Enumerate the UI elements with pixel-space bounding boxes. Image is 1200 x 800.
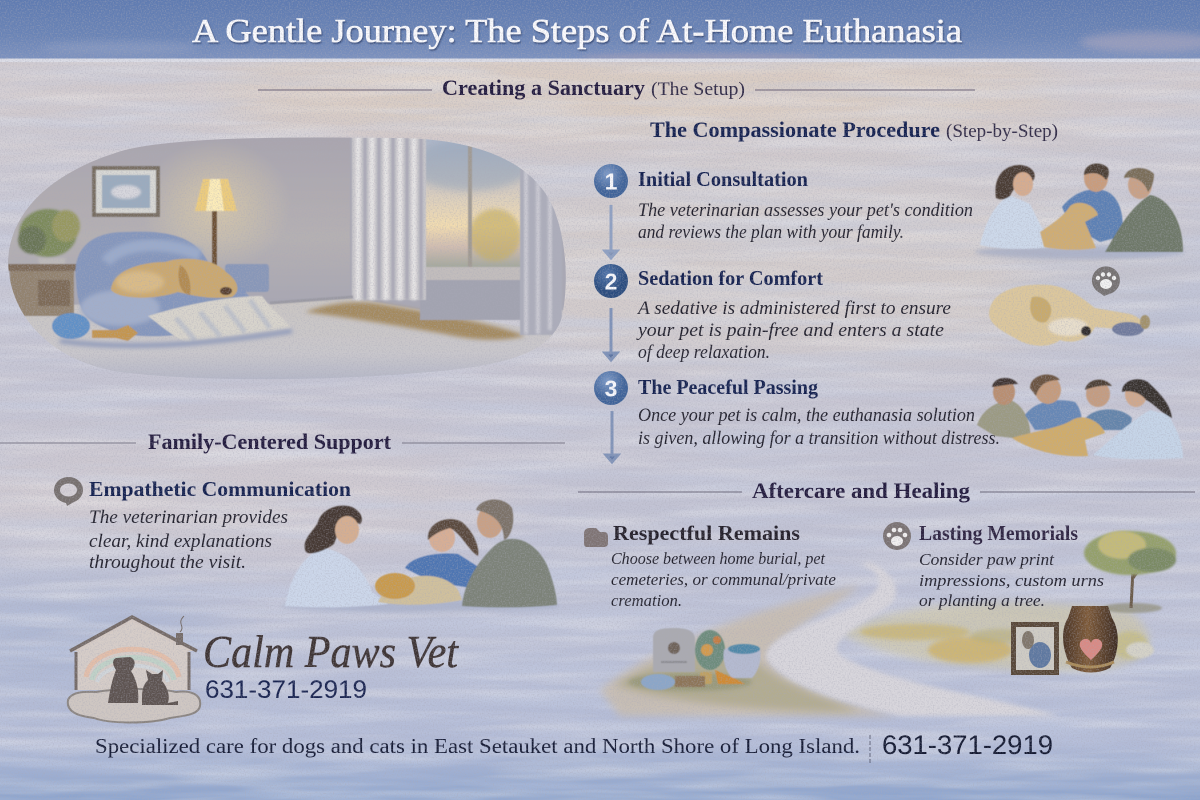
nightstand <box>8 264 76 271</box>
illustration: vet with child, parent and dog <box>280 500 560 612</box>
skirting <box>270 297 353 303</box>
father <box>462 539 557 607</box>
child <box>405 554 480 588</box>
title banner <box>0 0 1200 62</box>
body text: clear, kind explanations <box>89 532 272 552</box>
title: A Gentle Journey: The Steps of At-Home Euthanasia <box>192 13 962 50</box>
icon: paw speech bubble <box>1092 266 1120 296</box>
arrow 1 to 2 <box>605 205 617 258</box>
man blue <box>1062 189 1123 242</box>
illustration: photo frame <box>1011 622 1059 675</box>
footer line <box>95 730 1053 765</box>
block: lasting memorials text: Consider paw print <box>919 550 1055 569</box>
vet <box>980 196 1062 249</box>
heading: aftercare and healing: Aftercare and Healing <box>752 478 970 503</box>
plant <box>16 208 82 264</box>
step 2 badge <box>594 264 628 298</box>
step 1 text: and reviews the plan with your family. <box>638 223 904 243</box>
block: respectful remains text: Choose between home burial, pet <box>611 549 826 568</box>
step 3 badge <box>594 371 628 405</box>
block: respectful remains heading: Respectful Remains <box>613 521 800 545</box>
illustration: sedated dog resting <box>989 266 1150 346</box>
illustration: urn with heart <box>1063 606 1154 672</box>
step 2 heading: Sedation for Comfort <box>638 266 823 290</box>
heading: creating a sanctuary <box>258 75 975 100</box>
dog <box>378 576 462 605</box>
jar <box>723 644 761 678</box>
logo wordmark: Calm Paws Vet <box>203 626 459 677</box>
step 2 <box>594 264 951 363</box>
dog <box>1040 203 1098 250</box>
man green <box>1105 195 1183 252</box>
icon: paw circle <box>883 522 911 550</box>
block: lasting memorials text: or planting a tree. <box>919 591 1045 610</box>
step 2 text: of deep relaxation. <box>638 343 770 363</box>
block: empathetic communication <box>54 477 351 573</box>
flowers <box>695 630 725 670</box>
icon: folder <box>584 528 608 547</box>
arrow 3 <box>606 411 618 462</box>
step 1 <box>594 164 973 258</box>
step 3 text: Once your pet is calm, the euthanasia solution <box>638 406 975 426</box>
sofa cushion right <box>225 264 269 292</box>
footer phone: 631-371-2919 <box>882 730 1053 760</box>
heading: compassionate procedure: (Step-by-Step) <box>946 121 1058 142</box>
block: lasting memorials text: impressions, custom urns <box>919 571 1104 590</box>
step 2 text: your pet is pain-free and enters a state <box>636 321 944 341</box>
illustration: vet and family with dog <box>975 164 1185 259</box>
illustration: family gathered with vet <box>977 374 1183 459</box>
heart <box>1080 639 1102 660</box>
heading: creating a sanctuary: (The Setup) <box>651 79 745 100</box>
footer tagline: Specialized care for dogs and cats in East Setauket and North Shore of Long Island. <box>95 734 860 758</box>
winding path <box>767 562 1060 716</box>
heading: compassionate procedure: The Compassionate Procedure <box>650 117 940 142</box>
toys <box>52 313 90 339</box>
heading: creating a sanctuary: Creating a Sanctuary <box>442 75 645 100</box>
step 1 badge <box>594 164 628 198</box>
block: respectful remains text: cemeteries, or communal/private <box>611 570 836 589</box>
step 2 text: A sedative is administered first to ensure <box>636 299 951 319</box>
step 1 heading: Initial Consultation <box>638 167 808 191</box>
floor <box>26 298 552 379</box>
arrow 2 to 3 <box>605 308 617 360</box>
illustration: tree <box>1084 531 1176 613</box>
heading: Empathetic Communication <box>89 477 351 501</box>
block: lasting memorials heading: Lasting Memorials <box>919 521 1078 545</box>
logo phone: 631-371-2919 <box>205 676 367 704</box>
gravestone <box>653 628 695 672</box>
step 3 text: is given, allowing for a transition without distress. <box>638 429 1000 449</box>
step 3 badge: 3 <box>605 376 617 402</box>
vet <box>285 548 388 607</box>
curtains <box>352 132 426 300</box>
sofa <box>75 232 262 336</box>
blanket <box>148 296 291 342</box>
picture <box>92 166 160 217</box>
step 3 <box>594 371 1000 462</box>
illustration: sanctuary room with sleeping dog <box>8 138 566 379</box>
body text: throughout the visit. <box>89 553 246 573</box>
illustration: gravestone and keepsakes <box>628 628 761 691</box>
dog and cat silhouettes <box>108 657 138 703</box>
window <box>426 140 520 267</box>
heading: family-centered support: Family-Centered Support <box>148 429 392 454</box>
lamp <box>212 210 217 265</box>
step 2 badge: 2 <box>605 268 617 294</box>
dog <box>111 259 237 298</box>
step 1 text: The veterinarian assesses your pet's condition <box>638 201 973 221</box>
keepsakes <box>700 672 712 684</box>
logo: Calm Paws Vet <box>68 616 459 722</box>
logo house icon <box>68 616 200 722</box>
block: respectful remains text: cremation. <box>611 591 682 610</box>
step 1 badge: 1 <box>605 168 618 194</box>
icon: speech bubble <box>54 477 83 506</box>
illustration: path through memorial landscape <box>600 562 1149 716</box>
step 3 heading: The Peaceful Passing <box>638 375 818 399</box>
body text: The veterinarian provides <box>89 508 288 528</box>
